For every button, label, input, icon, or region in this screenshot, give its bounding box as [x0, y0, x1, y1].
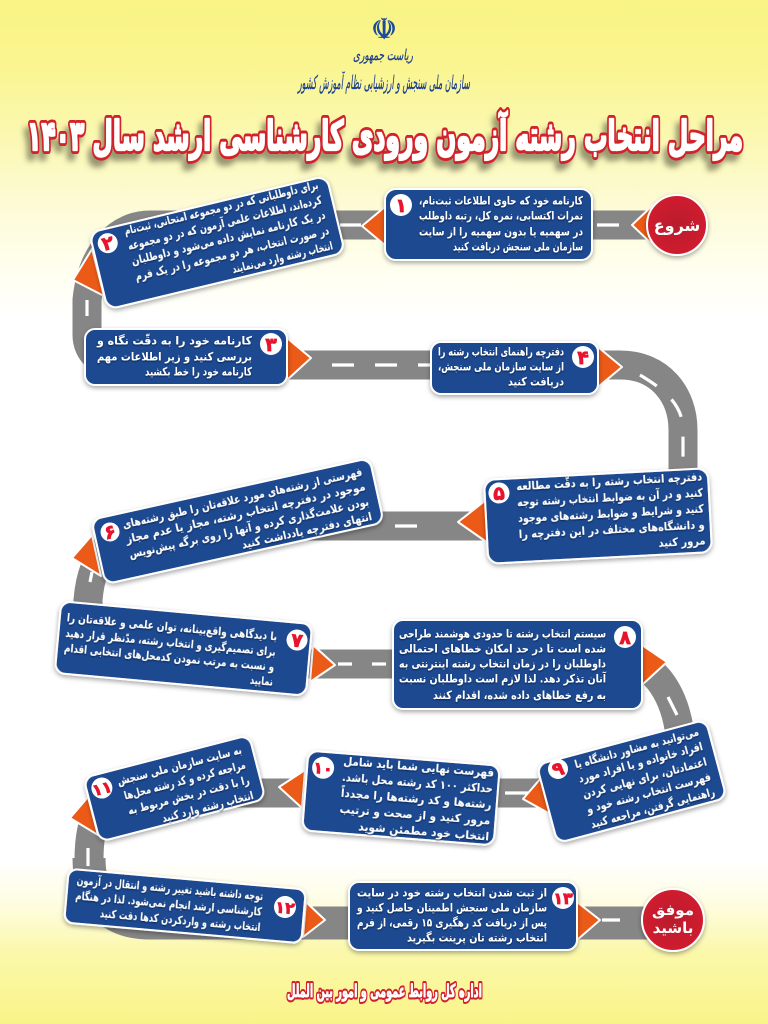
step text [120, 465, 373, 576]
rotated card [484, 468, 712, 564]
step 9 [523, 719, 727, 843]
step text [356, 886, 547, 944]
step 11 [70, 735, 266, 843]
number badge [96, 231, 120, 257]
step 8 [393, 620, 667, 709]
rotated card [83, 735, 266, 843]
number badge [614, 626, 636, 649]
step text: انتخاب خود مطمئن شوید [358, 819, 490, 845]
step text: کارنامه خود را به دقّت نگاه و [96, 333, 252, 348]
step text: موجود در دفترچه انتخاب رشته، مجاز یا عدم مجاز [124, 479, 367, 547]
panel [484, 468, 712, 564]
step text: انتخاب رشته و واردکردن کدها دقت کنید [99, 906, 261, 935]
arrow [279, 770, 305, 808]
step 6 [72, 458, 384, 584]
panel [537, 720, 727, 843]
number badge [546, 756, 571, 783]
step text: کرده‌اند، اطلاعات علمی آزمون که در دو مجموعه [126, 193, 324, 254]
start arrow [632, 205, 653, 245]
arrow [458, 500, 488, 543]
rotated card [64, 869, 306, 943]
number badge [98, 520, 122, 545]
step text: انتخاب رشته تان پرینت بگیرید [407, 930, 547, 944]
step text: آنان تذکر دهد. لذا لازم است داوطلبان نسبت [399, 672, 607, 686]
step text: کنید و در آن به ضوابط انتخاب رشته توجه [517, 485, 704, 510]
finish label [652, 901, 694, 937]
step 5 [458, 468, 712, 564]
panel [83, 735, 266, 842]
rotated card [536, 719, 727, 843]
number badge: ۸ [619, 627, 631, 649]
number badge: ۱۳ [553, 889, 573, 908]
panel [89, 176, 345, 309]
step text: فهرست نهایی شما باید شامل [343, 754, 495, 780]
step text: انتخاب رشته وارد می‌نمایند [231, 238, 334, 277]
step text: کنید و شرایط و ضوابط رشته‌های موجود [518, 501, 704, 526]
step text: کارنامه خود که حاوی اطلاعات ثبت‌نام، [419, 194, 583, 208]
step text [123, 178, 335, 299]
number badge: ۱۱ [90, 777, 114, 800]
step text [516, 469, 706, 558]
step text: از ثبت شدن انتخاب رشته خود در سایت [357, 886, 547, 900]
step text: به سایت سازمان ملی سنجش [116, 743, 243, 788]
step text: مراجعه کرده و کد رشته محل‌ها [122, 758, 247, 803]
step text: سازمان ملی سنجش دریافت کنید [453, 240, 583, 254]
step text: کارشناسی ارشد انجام نمی‌شود. لذا در هنگام [75, 888, 263, 920]
text: سازمان ملی سنجش و ارزشیابی نظام آموزش کشور [297, 71, 470, 94]
footer credit: اداره کل روابط عمومی و امور بین الملل [287, 981, 482, 1002]
step text: در صورت انتخاب، هر دو مجموعه را در یک فرم [134, 223, 331, 284]
step text: توجه داشته باشید تغییر رشته و انتقال در آزمون [76, 873, 264, 904]
number badge [572, 346, 594, 369]
rotated card [89, 175, 345, 309]
number badge [286, 629, 308, 653]
step text: از سایت سازمان ملی سنجش، [438, 360, 564, 374]
step text: سیستم انتخاب رشته تا حدودی هوشمند طراحی [399, 626, 606, 642]
number badge [390, 194, 412, 217]
step 10 [279, 751, 500, 845]
step text: حداکثر ۱۰۰ کد رشته محل باشد. [342, 770, 493, 796]
arrow [287, 338, 311, 380]
road [87, 225, 683, 923]
step text: فهرستی از رشته‌های مورد علاقه‌تان را طبق رشته‌های [121, 465, 364, 532]
start marker [632, 195, 707, 255]
step 12 [64, 869, 325, 943]
step text: و نسبت به مرتب نمودن کدمحل‌های انتخابی اقدام [63, 641, 275, 675]
number badge: ۴ [577, 347, 589, 369]
footer credit [287, 981, 482, 1002]
step text: پس از دریافت کد رهگیری ۱۵ رقمی، از فرم [357, 916, 547, 930]
step text: کارنامه خود را خط بکشید [145, 364, 252, 380]
number badge: ۱ [395, 195, 407, 217]
step text: به رفع خطاهای داده شده، اقدام کنند [433, 688, 606, 702]
number badge: ۶ [102, 520, 118, 544]
rotated card [91, 458, 384, 584]
arrow [303, 902, 325, 937]
number badge: ۱۲ [274, 897, 296, 918]
step text: نمرات اکتسابی، نمره کل، رتبه داوطلب [419, 208, 583, 224]
rotated card [302, 751, 500, 845]
step text: شده است تا در حد امکان خطاهای احتمالی [399, 642, 606, 656]
step 13 [349, 882, 600, 950]
rotated card [55, 601, 312, 696]
organisation name: presidency: ریاست جمهوری [353, 46, 413, 64]
arrow [642, 645, 667, 685]
footer credit: اداره کل روابط عمومی و امور بین الملل [287, 981, 482, 1002]
step text: در یک کارنامه نمایش داده می‌شود و داوطلبان [130, 208, 327, 269]
arrow [73, 249, 104, 296]
step text [62, 610, 278, 689]
number badge: ۵ [493, 482, 506, 505]
step text: داوطلبان را در زمان انتخاب رشته اینترنتی به [399, 656, 606, 672]
arrow [577, 902, 600, 940]
step text: نمایید [249, 673, 274, 689]
number badge: ۳ [265, 334, 277, 356]
panel [85, 329, 287, 385]
step text: انتهای دفترچه یادداشت کنید [240, 509, 373, 552]
start label: شروع [654, 216, 700, 235]
panel [91, 458, 384, 584]
step text: افراد خانواده و یا افراد مورد [577, 739, 704, 787]
step text: مرور کنید و از صحت و ترتیب [339, 802, 491, 829]
finish circle [642, 889, 704, 951]
step 1 [362, 189, 592, 260]
step text [419, 194, 583, 254]
step 2 [73, 175, 345, 309]
step text: اعتمادتان، برای نهایی کردن [581, 755, 708, 801]
arrow [598, 347, 622, 387]
step text: و دانشگاه‌های مختلف در این دفترچه را [518, 517, 705, 542]
number badge: ۹ [550, 757, 567, 782]
step text: دریافت کنید [508, 374, 564, 388]
panel [385, 189, 592, 260]
arrow [362, 206, 386, 246]
step 3 [85, 329, 311, 385]
arrow [70, 797, 98, 835]
step text: در سهمیه یا بدون سهمیه را از سایت [419, 224, 583, 240]
panel [302, 751, 500, 845]
arrow [310, 645, 335, 682]
step text: دفترچه راهنمای انتخاب رشته را [438, 344, 564, 358]
panel [349, 882, 577, 950]
step 4 [431, 342, 622, 394]
panel [393, 620, 642, 709]
finish label: موفق [652, 901, 694, 919]
step text [399, 626, 607, 702]
step 7 [55, 601, 335, 696]
step text: سازمان ملی سنجش اطمینان حاصل کنید و [356, 900, 547, 916]
step text: برای داوطلبانی که در دو مجموعه امتحانی، ثبت‌نام [123, 178, 320, 239]
step text: فهرست انتخاب رشته خود و [584, 770, 713, 817]
step text [96, 333, 252, 380]
step text [338, 754, 495, 845]
number badge [260, 333, 282, 356]
panel [55, 601, 312, 696]
step text: با دیدگاهی واقع‌بینانه، توان علمی و علاقه‌تان را [66, 610, 278, 644]
finish label: باشید [653, 919, 693, 937]
panel [64, 869, 306, 943]
step text: راهنمایی گرفتن، مراجعه کنید [589, 784, 716, 831]
emblem: ☫ [371, 12, 397, 46]
panel [431, 342, 598, 394]
step text: رشته‌ها و کد رشته‌ها را مجدداً [340, 784, 492, 813]
step text: بودن علامت‌گذاری کرده و آنها را روی برگه پیش‌نویس [128, 494, 370, 562]
step text: انتخاب رشته وارد کنید [160, 788, 255, 826]
number badge: ۱۰ [313, 758, 334, 779]
step text [116, 743, 255, 835]
step text [438, 344, 564, 388]
number badge: ۲ [100, 231, 116, 256]
step text: بررسی کنید و زیر اطلاعات مهم [97, 350, 252, 364]
arrow [72, 535, 101, 576]
number badge: ۷ [290, 629, 304, 652]
start circle [647, 195, 707, 255]
step text: دفترچه انتخاب رشته را به دقّت مطالعه [516, 469, 703, 493]
step text: برای تصمیم‌گیری و انتخاب رشته، مدّنظر قرار دهید [65, 626, 276, 660]
number badge [488, 482, 510, 505]
step text [572, 725, 716, 831]
step text: را با دقت در بخش مربوط به [126, 773, 251, 818]
step text: می‌توانید به مشاور دانشگاه یا [573, 725, 701, 772]
arrow [523, 778, 552, 815]
step text: مرور کنید [658, 533, 706, 551]
finish marker [642, 889, 704, 951]
step text [73, 873, 264, 935]
